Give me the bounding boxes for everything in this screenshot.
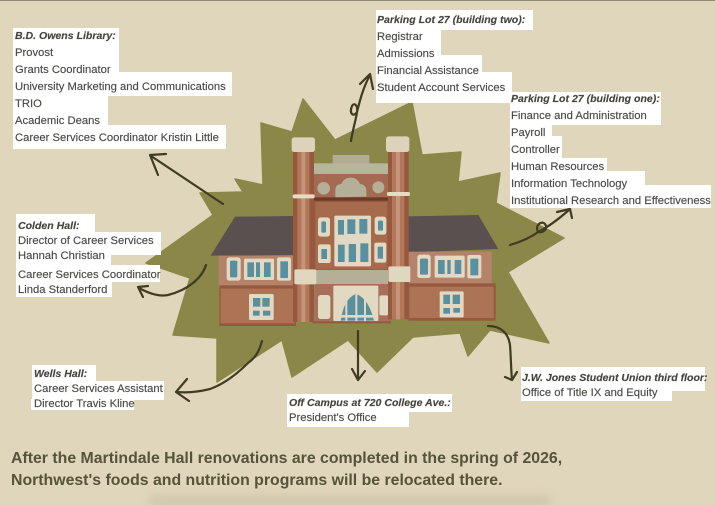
label: Parking Lot 27 building one: Payroll [511,127,545,139]
label: B.D. Owens Library: B.D. Owens Library: [15,30,116,42]
label: J.W. Jones Student Union: Office of Title IX and Equity [522,387,658,399]
label: Colden Hall: Director of Career Services [18,235,154,247]
label: Parking Lot 27 building one: Parking Lot 27 (building one): [511,93,660,105]
label: J.W. Jones Student Union: J.W. Jones Student Union third floor: [522,372,708,384]
arrow: to J.W. Jones Student Union [488,326,517,380]
label: Parking Lot 27 building two [376,10,533,103]
arrow: to Wells Hall [176,341,262,401]
label: Parking Lot 27 building one [510,92,711,208]
label: Parking Lot 27 building one: Institutional Research and Effectiveness [511,195,711,207]
bottom note [11,450,562,489]
label: Parking Lot 27 building two: Parking Lot 27 (building two): [377,14,525,26]
label: B.D. Owens Library: Career Services Coordinator Kristin Little [15,132,219,144]
label: Off Campus at 720 College Ave.: President's Office [289,412,377,424]
right wing [408,215,498,321]
label: Colden Hall: Linda Standerford [18,284,107,296]
label: B.D. Owens Library: TRIO [15,98,42,110]
label: B.D. Owens Library: Grants Coordinator [15,64,111,76]
label: Parking Lot 27 building two: Student Account Services [377,82,505,94]
label: B.D. Owens Library: Provost [15,47,53,59]
label: Parking Lot 27 building two: Financial Assistance [377,65,479,77]
arrow: to Off Campus [352,331,365,380]
right tower [386,136,410,319]
label: Wells Hall: Wells Hall: [34,368,87,380]
label: Off Campus at 720 College Ave.: Off Campus at 720 College Ave.: [289,397,451,409]
arrow: to B.D. Owens Library [150,154,223,204]
arrow: to Colden Hall [138,265,206,297]
label: B.D. Owens Library: University Marketing and Communications [15,81,226,93]
label: B.D. Owens Library [13,28,232,149]
starburst shape [146,99,564,382]
label: Wells Hall: Career Services Assistant [34,383,163,395]
building [211,136,498,326]
label: Colden Hall: Career Services Coordinator [18,269,161,281]
label: B.D. Owens Library: Academic Deans [15,115,100,127]
label: Off Campus at 720 College Ave. [287,394,452,427]
label: Parking Lot 27 building one: Human Resources [511,161,604,173]
label: Wells Hall [31,365,164,410]
arrow: to Parking Lot 27 building two [351,74,373,141]
label: Colden Hall: Hannah Christian [18,250,105,262]
bottom note: After the Martindale Hall renovations are completed in the spring of 2026, [11,450,562,467]
top edge line [0,0,715,1]
label: Colden Hall [16,214,161,297]
left wing [211,216,296,326]
label: Parking Lot 27 building two: Registrar [377,31,423,43]
label: Colden Hall: Colden Hall: [18,220,80,232]
bottom shadow [150,497,550,505]
label: Parking Lot 27 building one: Controller [511,144,560,156]
central block [313,155,391,323]
label: J.W. Jones Student Union [521,367,708,401]
left tower [292,137,316,322]
bottom note: Northwest's foods and nutrition programs will be relocated there. [11,472,502,489]
label: Parking Lot 27 building one: Finance and Administration [511,110,647,122]
label: Parking Lot 27 building one: Information Technology [511,178,627,190]
label: Parking Lot 27 building two: Admissions [377,48,435,60]
label: Wells Hall: Director Travis Kline [34,398,135,410]
arrow: to Parking Lot 27 building one [510,209,572,245]
